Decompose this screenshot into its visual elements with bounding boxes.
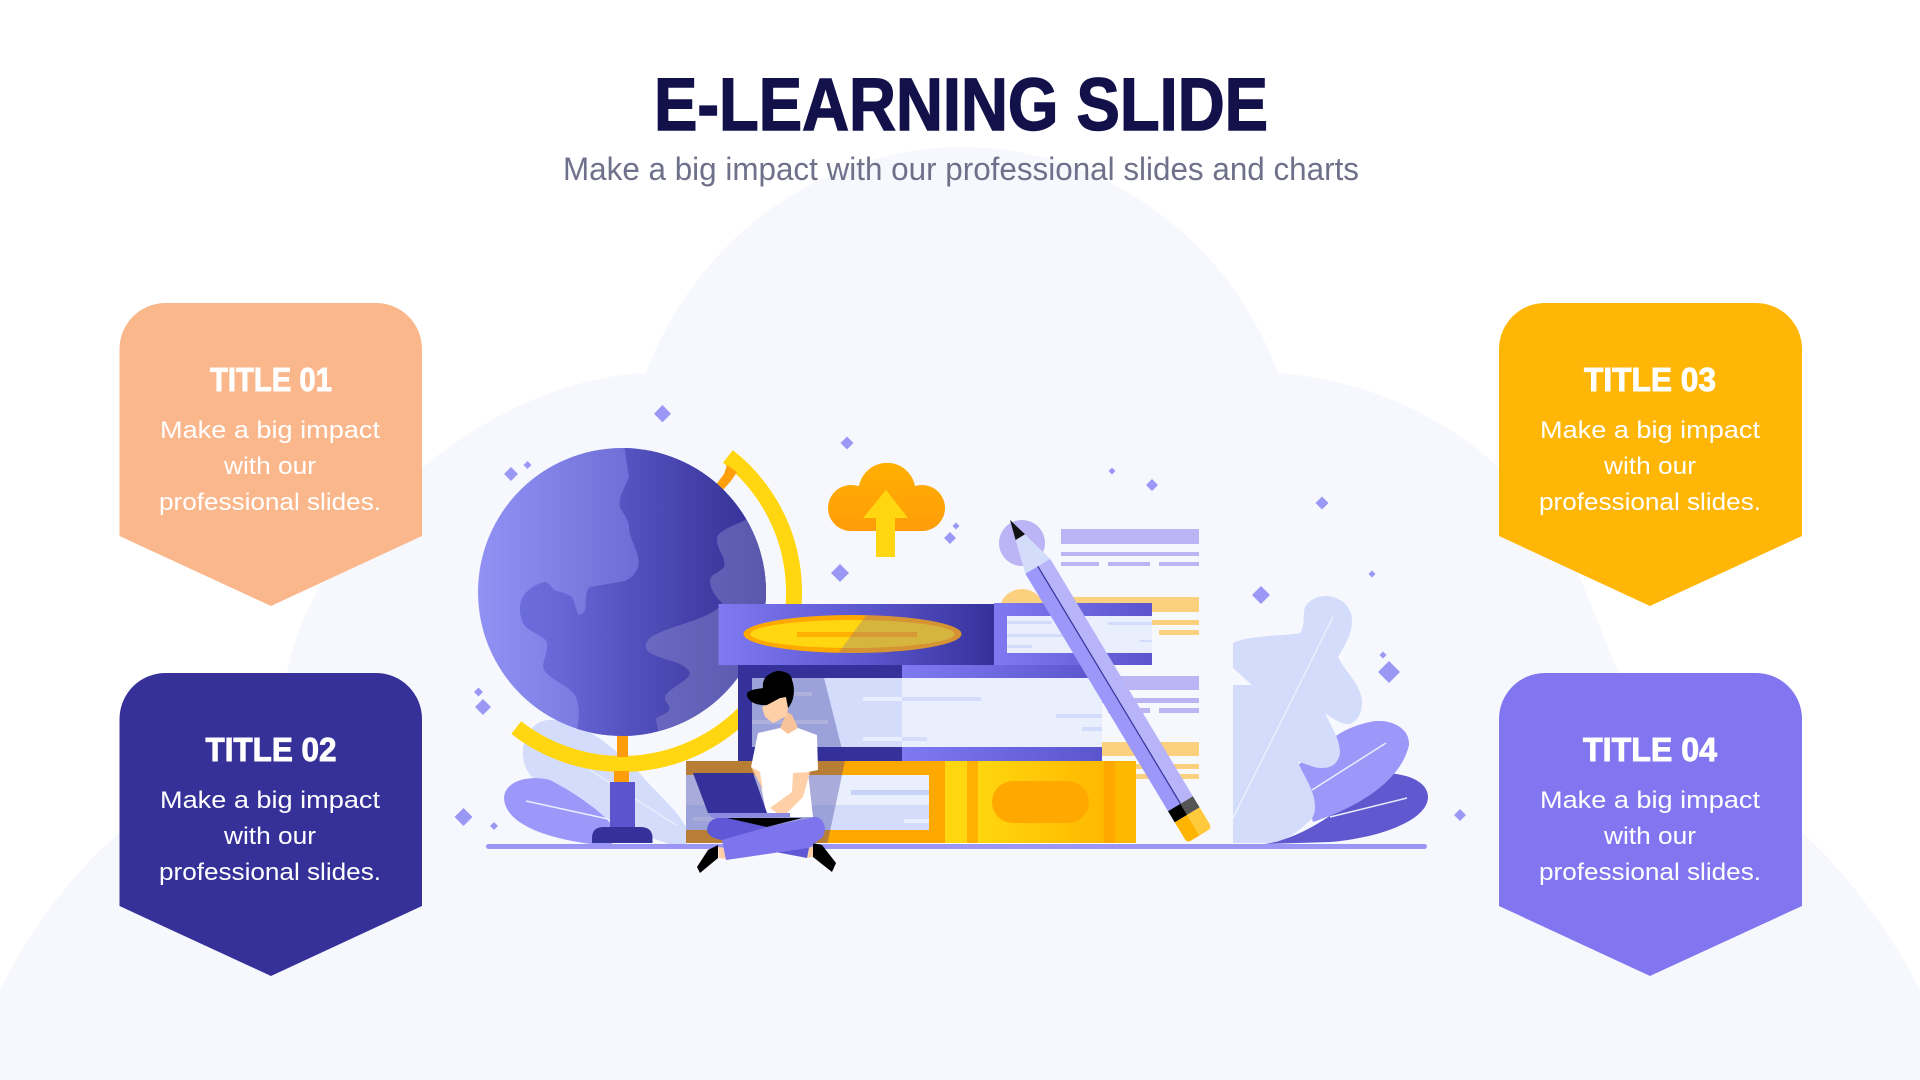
text: title 04 body (1539, 787, 1761, 886)
icon: cloud upload (828, 463, 945, 557)
icon: right leaves (1233, 596, 1428, 844)
icon: person with laptop (693, 671, 836, 873)
icon: globe (478, 448, 802, 843)
text: title 03 body: professional slides. (1539, 489, 1761, 516)
panel: title 04 (1499, 673, 1802, 976)
text: title 02 body: with our (223, 823, 316, 850)
text: title 01 body: with our (223, 453, 316, 480)
document lines behind books (999, 520, 1199, 779)
icon: top purple book (718, 603, 1152, 665)
heading: title 02: TITLE 02 (206, 731, 336, 768)
subtitle: Make a big impact with our professional slides and charts (563, 151, 1359, 187)
text: title 03 body: with our (1603, 453, 1696, 480)
panel: title 03 (1499, 303, 1802, 606)
illustration: e-learning scene (454, 405, 1466, 873)
text: title 02 body: Make a big impact (160, 787, 380, 814)
text: title 02 body: professional slides. (159, 859, 381, 886)
heading: title 04: TITLE 04 (1583, 731, 1718, 768)
icon: ground line (486, 844, 1427, 849)
text: title 01 body: professional slides. (159, 489, 381, 516)
text: title 03 body (1539, 417, 1761, 516)
title: E-LEARNING SLIDE (654, 63, 1268, 146)
text: title 04 body: professional slides. (1539, 859, 1761, 886)
icon: pencil (998, 513, 1212, 843)
icon: middle purple book (738, 665, 1102, 761)
text: title 01 body: Make a big impact (160, 417, 380, 444)
panel: title 01 (120, 303, 422, 606)
panel: title 02 (120, 673, 422, 976)
icon: left leaves (504, 720, 686, 845)
icon: sparkle diamonds (454, 405, 1466, 830)
text: title 04 body: Make a big impact (1540, 787, 1760, 814)
heading: title 03: TITLE 03 (1584, 361, 1716, 398)
text: title 02 body (159, 787, 381, 886)
icon: bottom yellow book (686, 761, 1136, 843)
heading: title 01: TITLE 01 (210, 361, 332, 398)
translucent shadow behind person (686, 678, 845, 843)
text: title 01 body (159, 417, 381, 516)
text: title 03 body: Make a big impact (1540, 417, 1760, 444)
text: title 04 body: with our (1603, 823, 1696, 850)
